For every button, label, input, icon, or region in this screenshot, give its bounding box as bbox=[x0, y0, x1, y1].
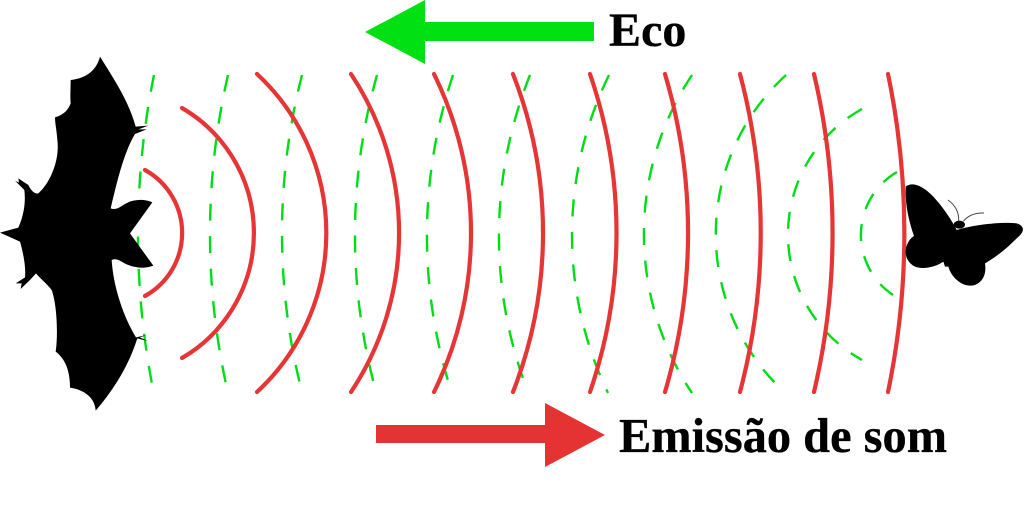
icon: butterfly silhouette bbox=[906, 184, 1023, 286]
label: Eco: Eco bbox=[609, 4, 686, 57]
arrow: echo, pointing left bbox=[365, 0, 594, 64]
icon: bat silhouette bbox=[0, 57, 153, 411]
arrow: sound emission, pointing right bbox=[376, 403, 605, 467]
label: Emissão de som: Emissão de som bbox=[619, 410, 947, 463]
red sound emission waves bbox=[145, 74, 904, 392]
green dashed echo waves bbox=[138, 75, 897, 393]
